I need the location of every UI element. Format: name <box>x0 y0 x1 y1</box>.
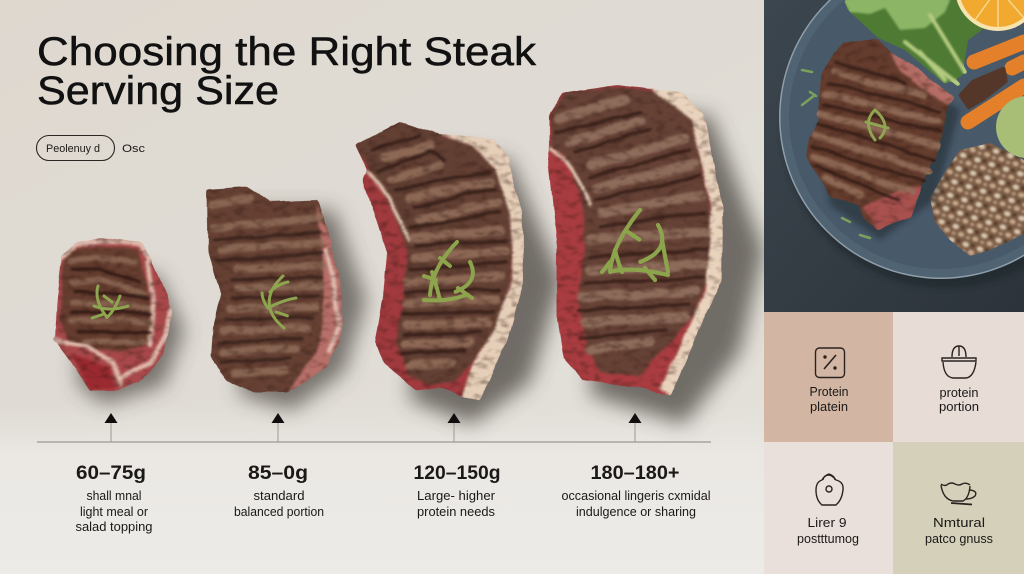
panel: protein portion: protein <box>940 386 979 400</box>
panel: liver posttumog: postttumog <box>797 532 859 546</box>
icon: serving cup <box>941 483 976 504</box>
panel: natural patco gnuss: Nmtural <box>933 516 985 530</box>
timeline axis <box>37 441 711 443</box>
steak: 60-75g small <box>55 238 184 404</box>
lime <box>996 96 1024 158</box>
serving label 4: occasional lingeris cxmidal <box>562 489 710 503</box>
serving label 2 <box>234 463 324 519</box>
arrow marker 3 <box>448 413 460 442</box>
steak: 120-150g large <box>355 122 562 424</box>
carrots <box>968 42 1024 122</box>
serving label 1: light meal or <box>80 505 148 519</box>
serving label 3: 120–150g <box>414 463 500 484</box>
filter pill: Osc <box>122 143 146 155</box>
panel: liver posttumog <box>764 442 893 574</box>
filter pill <box>36 136 146 160</box>
serving label 4: 180–180+ <box>590 463 680 484</box>
icon: percent square <box>816 348 844 378</box>
arrow marker 2 <box>272 413 284 442</box>
lower label band <box>0 405 764 574</box>
panel: protein portion: portion <box>939 400 979 414</box>
serving label 1: 60–75g <box>76 463 146 484</box>
herb <box>92 286 128 318</box>
steak: 85-90g standard <box>207 187 366 410</box>
serving label 3 <box>414 463 500 519</box>
plate herb flecks <box>802 70 870 238</box>
title: Serving Size <box>37 69 279 113</box>
serving label 3: Large- higher <box>417 489 495 503</box>
panel: protein platein: Protein <box>810 385 849 399</box>
serving label 4: indulgence or sharing <box>576 505 696 519</box>
herb <box>602 210 668 280</box>
panel: protein portion <box>893 312 1024 442</box>
panel: protein platein <box>764 312 893 442</box>
filter pill: Peolenuy d <box>46 143 100 155</box>
serving label 2: balanced portion <box>234 505 324 519</box>
panel: natural patco gnuss: patco gnuss <box>925 532 993 546</box>
serving label 3: protein needs <box>417 505 495 519</box>
arrow marker 4 <box>628 413 642 442</box>
steak: 180g+ extra large <box>548 85 764 424</box>
lemon <box>955 0 1024 31</box>
icon: figure outline <box>816 474 843 505</box>
icon: juicer bowl <box>942 346 976 378</box>
steak on plate <box>826 102 962 240</box>
serving label 1: shall mnal <box>86 489 142 503</box>
serving label 1: salad topping <box>76 520 153 534</box>
lettuce <box>844 0 990 84</box>
panel: protein platein: platein <box>810 400 848 414</box>
panel: liver posttumog: Lirer 9 <box>808 516 847 530</box>
herb <box>424 242 473 300</box>
serving label 2: 85–0g <box>248 463 308 484</box>
arrow marker 1 <box>104 413 118 442</box>
background panel <box>0 0 764 574</box>
plated steak photo <box>764 0 1024 312</box>
title <box>37 30 537 113</box>
panel: natural patco gnuss <box>893 442 1024 574</box>
roasted garnish <box>958 66 1008 110</box>
title: Choosing the Right Steak <box>37 30 537 74</box>
serving label 4 <box>562 463 710 519</box>
serving label 1 <box>76 463 153 534</box>
grain side <box>930 143 1024 256</box>
herb garnish <box>866 110 888 140</box>
herb <box>262 276 296 328</box>
serving label 2: standard <box>254 489 305 503</box>
